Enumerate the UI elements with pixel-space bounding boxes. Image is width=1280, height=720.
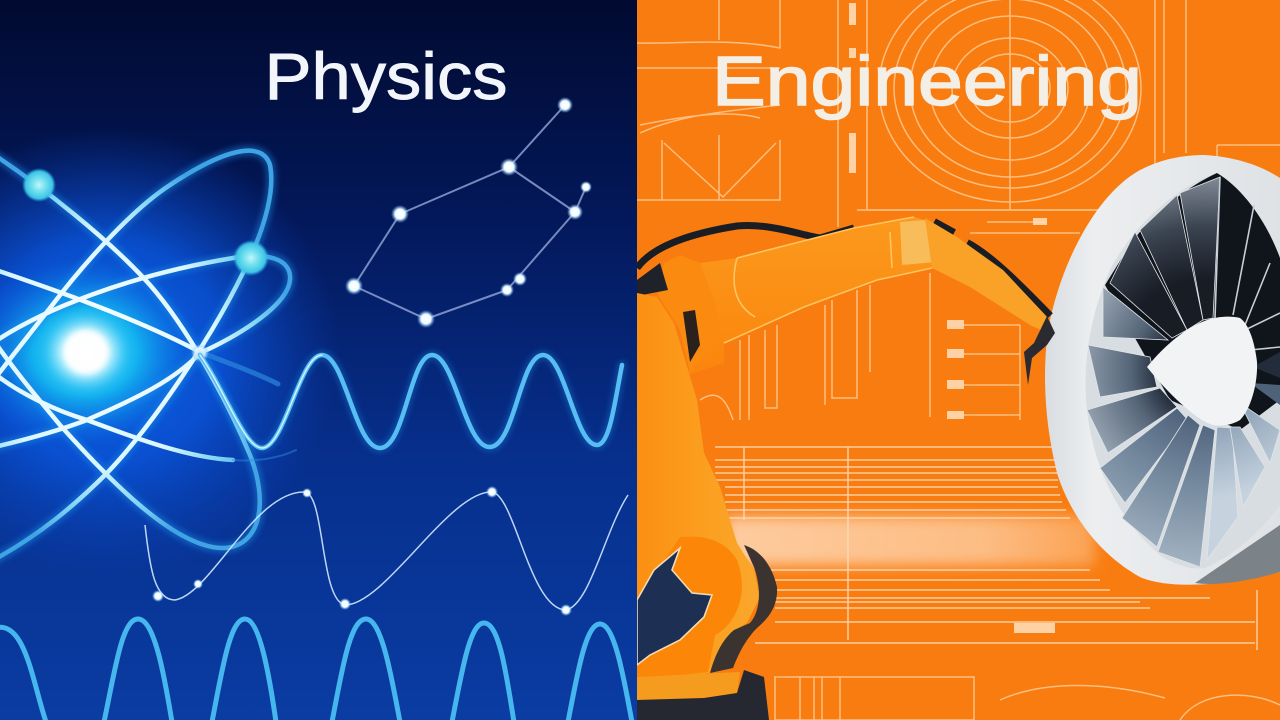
wave: bottom arcs — [0, 619, 632, 720]
turbine blades — [1087, 177, 1280, 567]
turbine housing lower shadow — [1195, 525, 1280, 584]
fading orbit tails — [205, 354, 296, 461]
arm base band — [637, 672, 740, 700]
turbine opening — [1086, 173, 1280, 568]
arm gripper — [1024, 316, 1055, 385]
panel: engineering — [637, 0, 1280, 720]
atom core centre — [64, 330, 108, 374]
atom orbits halo — [0, 151, 290, 562]
constellation — [345, 97, 592, 328]
title: physics: Physics — [264, 39, 508, 113]
title: engineering: Engineering — [712, 42, 1142, 120]
turbine hub backdrop — [1105, 173, 1280, 430]
atom core — [56, 325, 116, 379]
arm shoulder hump — [658, 255, 705, 368]
arm forearm — [925, 218, 1052, 335]
blueprint grid lines — [715, 447, 1257, 650]
arm base disc — [637, 537, 742, 680]
arm elbow joint — [900, 220, 932, 265]
turbine housing — [1045, 155, 1280, 585]
arm link highlight — [724, 217, 932, 343]
arm cable — [637, 226, 854, 268]
arm base foot — [637, 670, 769, 720]
arm damaged panel — [637, 548, 712, 665]
turbine — [1045, 155, 1280, 585]
arm base column — [637, 293, 760, 680]
arm dark stripe — [683, 310, 700, 362]
turbine upper blade edges — [1215, 177, 1280, 350]
robot arm — [637, 217, 1055, 720]
blueprint drawings — [637, 0, 1280, 720]
panel: physics — [0, 0, 637, 720]
wave: thin signal — [145, 486, 628, 616]
wave: large sine — [200, 355, 622, 448]
blueprint dimension blocks — [849, 3, 1055, 633]
arm upper link — [687, 217, 932, 375]
atom orbits — [0, 151, 290, 562]
atom cyan glow — [0, 268, 186, 436]
arm dark joint — [637, 263, 668, 296]
airflow streak — [725, 516, 1095, 566]
electrons — [22, 168, 269, 362]
arm forearm cable — [934, 222, 1050, 316]
turbine spinner — [1147, 317, 1257, 425]
atom blue glow — [0, 136, 326, 554]
arm dark cover — [710, 545, 777, 673]
